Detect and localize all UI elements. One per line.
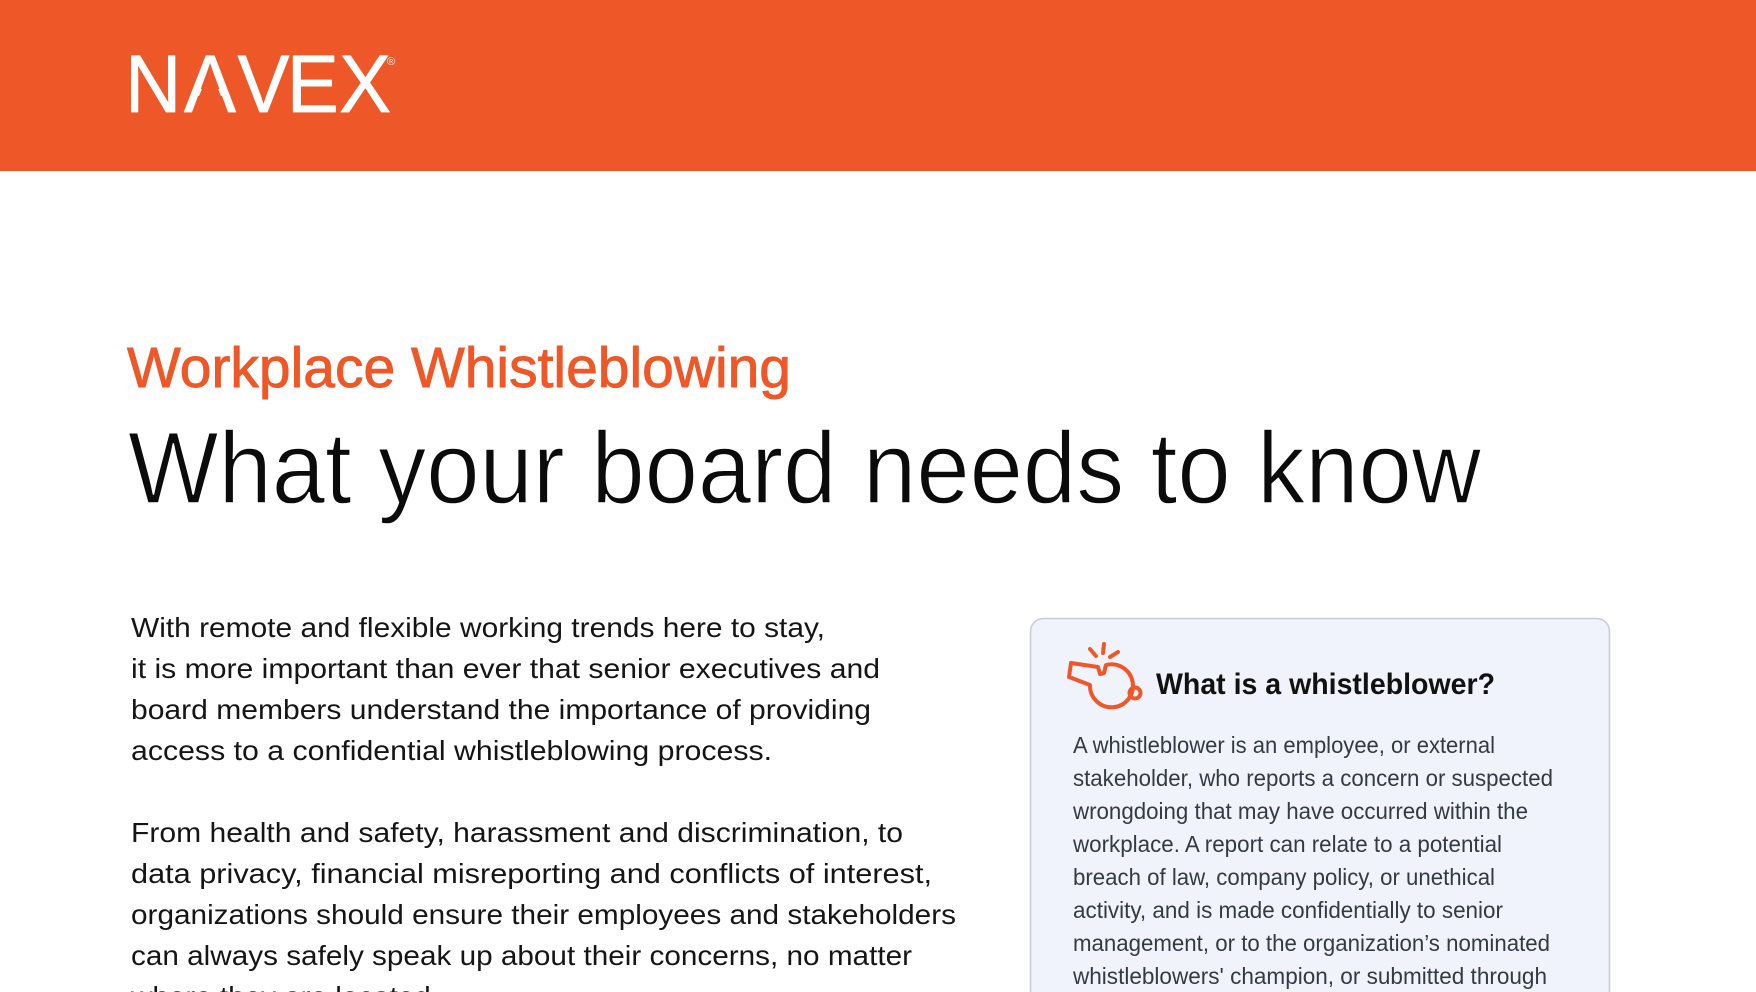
- panel body text: workplace. A report can relate to a potential: [1072, 831, 1502, 857]
- panel body text: stakeholder, who reports a concern or suspected: [1073, 765, 1553, 791]
- intro paragraph 1: With remote and flexible working trends here to stay,: [131, 612, 825, 643]
- panel heading: What is a whistleblower?: [1156, 668, 1495, 701]
- panel body text: management, or to the organization’s nominated: [1073, 930, 1550, 956]
- main title: What your board needs to know: [128, 411, 1481, 525]
- panel body text: wrongdoing that may have occurred within the: [1072, 798, 1528, 824]
- intro paragraph 1: it is more important than ever that senior executives and: [131, 653, 880, 684]
- intro paragraph 2: From health and safety, harassment and discrimination, to: [131, 817, 903, 848]
- intro paragraph 1: access to a confidential whistleblowing process.: [131, 735, 772, 766]
- intro paragraph 2: can always safely speak up about their concerns, no matter: [131, 940, 912, 971]
- intro paragraph 2: organizations should ensure their employees and stakeholders: [131, 899, 956, 930]
- panel body text: breach of law, company policy, or unethical: [1073, 864, 1495, 890]
- intro paragraph 2: data privacy, financial misreporting and conflicts of interest,: [131, 858, 932, 889]
- logo: NAVEX: NAVEX: [125, 38, 391, 129]
- eyebrow heading: Workplace Whistleblowing: [127, 336, 791, 400]
- logo: NAVEX: ®: [387, 56, 395, 68]
- icon: whistle: [1069, 644, 1140, 707]
- panel body text: whistleblowers' champion, or submitted through: [1072, 963, 1547, 989]
- intro paragraph 1: [131, 612, 880, 766]
- intro paragraph 2: [130, 817, 956, 992]
- panel body text: [1072, 732, 1553, 989]
- header band: [0, 0, 1756, 171]
- panel body text: A whistleblower is an employee, or external: [1073, 732, 1495, 758]
- panel: what is a whistleblower: [1030, 618, 1610, 992]
- intro paragraph 1: board members understand the importance of providing: [131, 694, 871, 725]
- panel body text: activity, and is made confidentially to senior: [1073, 897, 1503, 923]
